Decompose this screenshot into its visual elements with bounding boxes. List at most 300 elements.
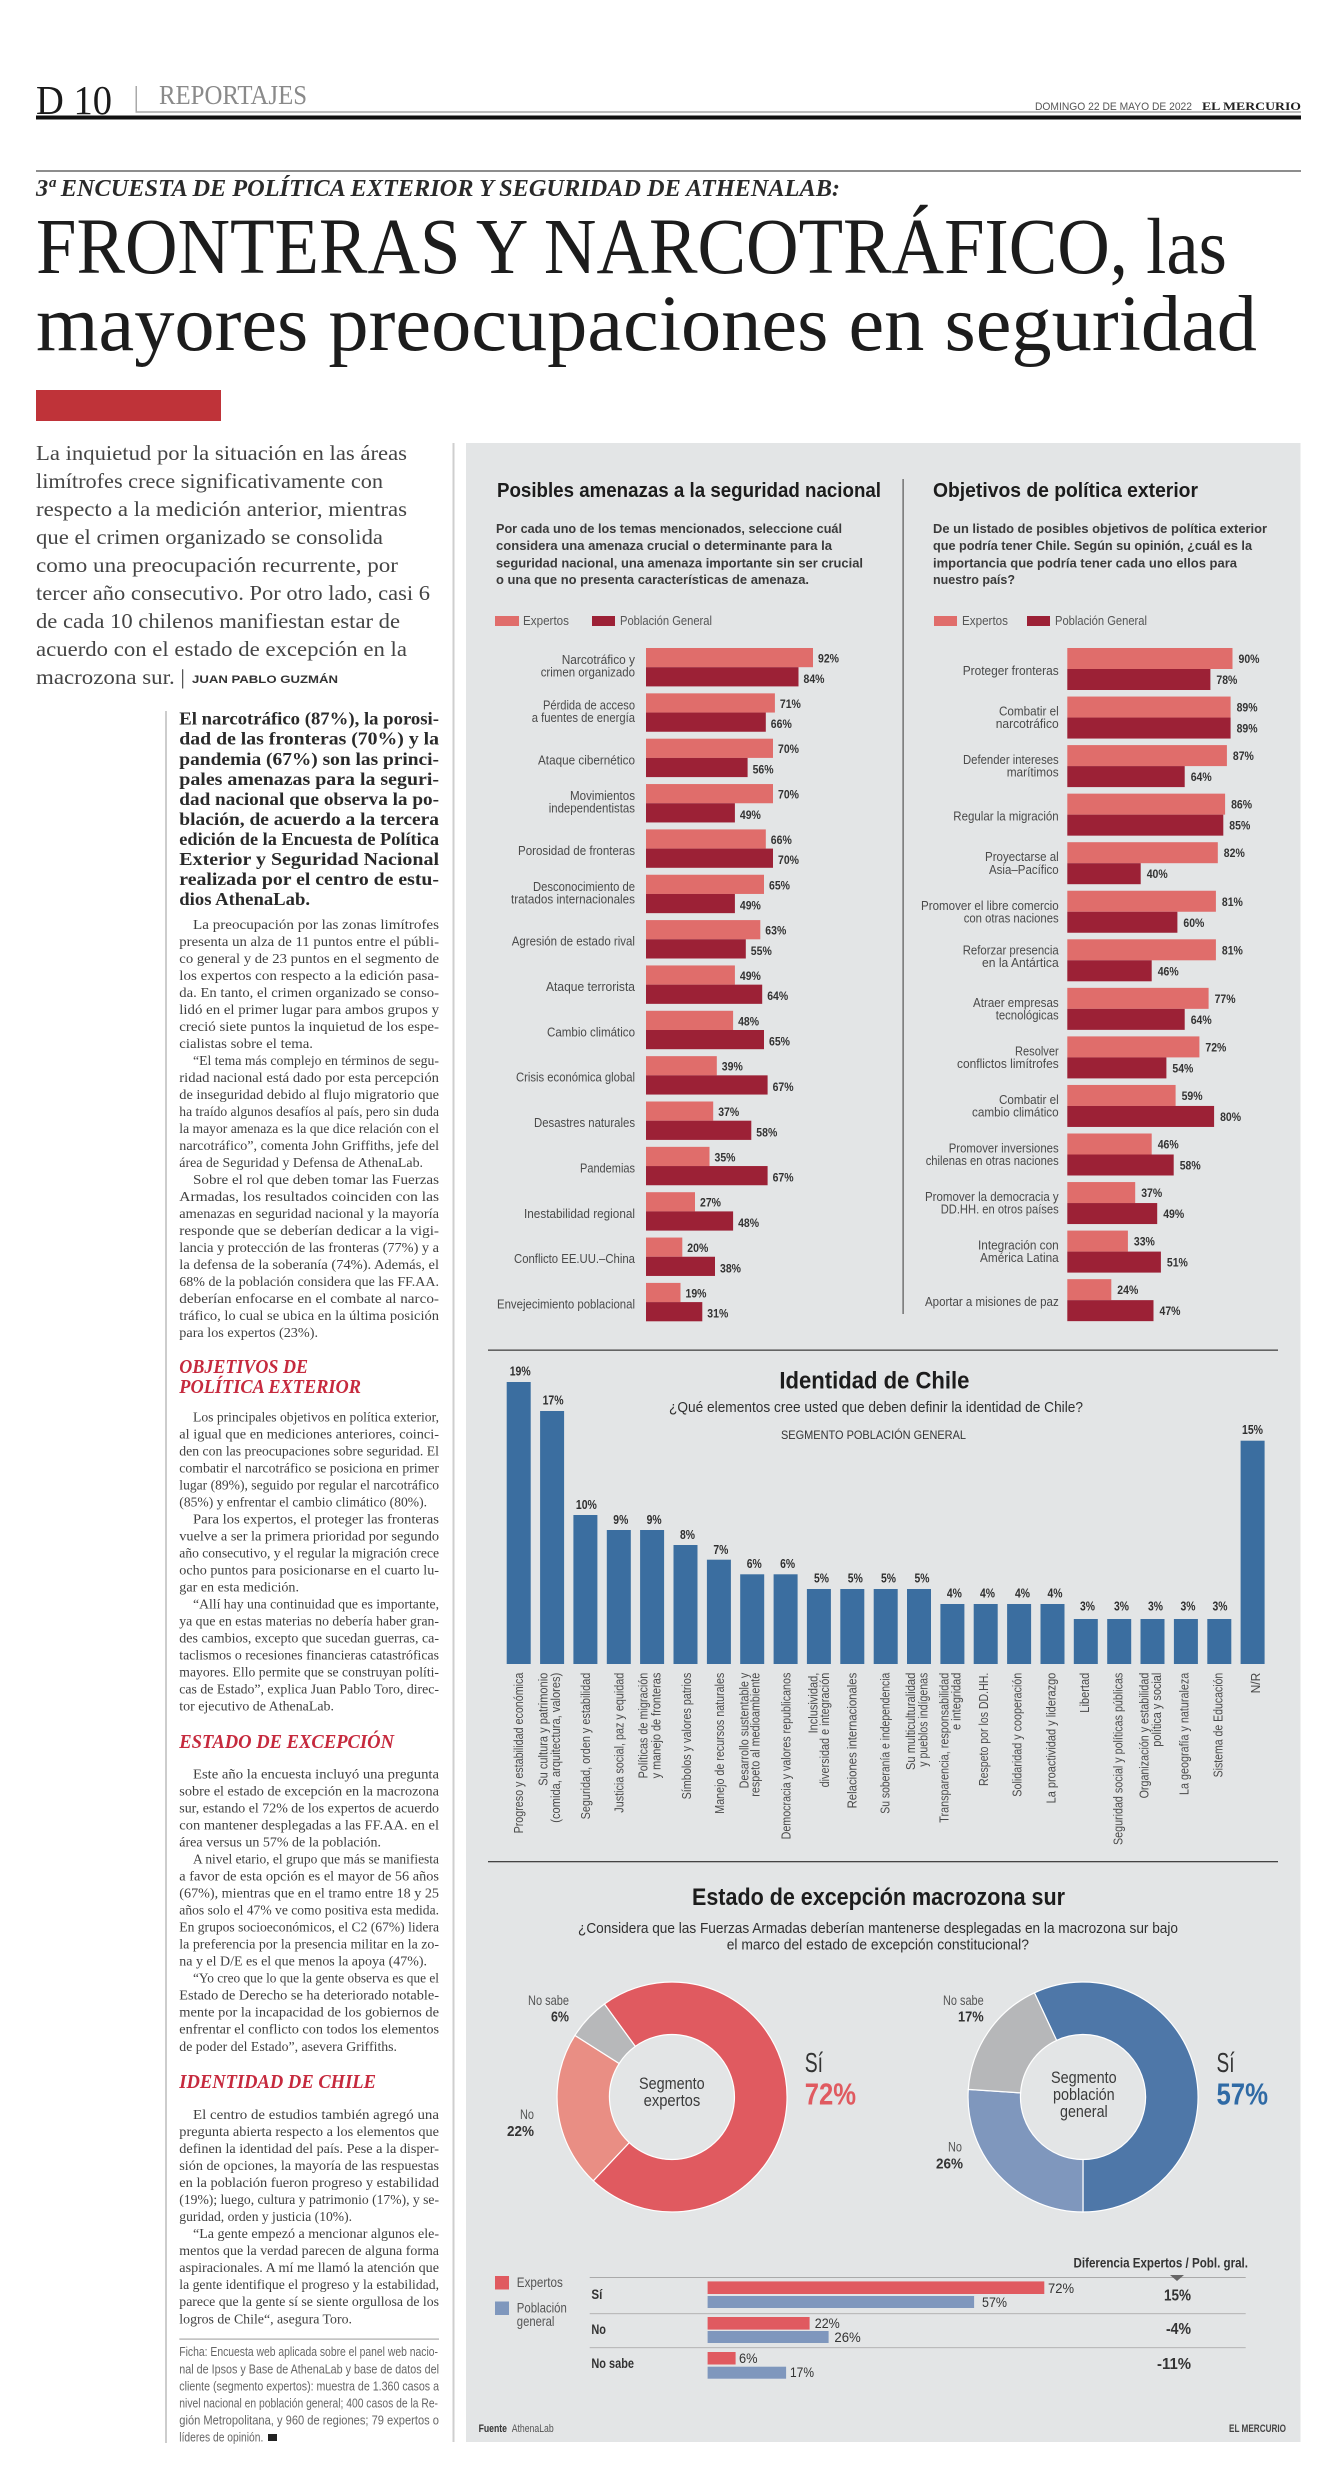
panel: estado de excepción macrozona sur [479, 1884, 1286, 2435]
body text: objetivos [179, 1410, 439, 1714]
row: terrorista [546, 965, 788, 1004]
row: cambio climático: cambio climático [972, 1106, 1059, 1120]
methodology note: Ficha: Encuesta web aplicada sobre el panel web nacio- [179, 2345, 438, 2359]
row: marítimos: 64% [1191, 772, 1212, 784]
question [578, 1920, 1178, 1954]
intro paragraph: blación, de acuerdo a la tercera [179, 809, 439, 829]
body text: seguridad nacional: amenazas en seguridad nacional y la mayoría [179, 1207, 440, 1222]
heading: Estado de excepción macrozona sur [692, 1884, 1065, 1911]
body text: seguridad nacional: da. En tanto, el crimen organizado se conso- [179, 986, 439, 1001]
body text: seguridad nacional: lidó en el primer lugar para ambos grupos y [179, 1003, 439, 1018]
segment label: SEGMENTO POBLACIÓN GENERAL [781, 1427, 966, 1442]
bar values: 10% [576, 1497, 597, 1512]
body text: objetivos: Los principales objetivos en política exterior, [193, 1410, 439, 1426]
row: cambio climático: 59% [1182, 1091, 1203, 1103]
body text: identidad: en la población fueron progreso y estabilidad [179, 2176, 439, 2191]
label: sí: Sí [805, 2047, 823, 2078]
row: no: 26% [834, 2329, 861, 2345]
row: democracia: 49% [1163, 1209, 1184, 1221]
row: estado rival: 55% [751, 946, 772, 958]
label: no sabe [528, 1992, 569, 2026]
bar values: 3% [1114, 1599, 1129, 1614]
intro paragraph: El narcotráfico (87%), la porosi- [179, 709, 439, 729]
row: libre comercio: Promover el libre comercio [921, 899, 1059, 913]
body text: seguridad nacional: la defensa de la soberanía (74%). Además, el [179, 1258, 439, 1273]
body text: estado de excepción: con mantener desplegadas a las FF.AA. en el [179, 1819, 439, 1834]
row: crisis económica: Crisis económica global [516, 1071, 635, 1085]
title line 2: mayores preocupaciones en seguridad [36, 281, 1257, 368]
row: sí: 57% [982, 2294, 1007, 2310]
row: envejecimiento [497, 1283, 728, 1321]
rotated category labels: Manejo de recursos naturales [713, 1673, 727, 1814]
legend: Expertos [962, 614, 1008, 628]
row: cambio climático: Cambio climático [547, 1025, 635, 1039]
rotated category labels: y pueblos indígenas [917, 1673, 931, 1767]
body text: objetivos: combatir el narcotráfico se posiciona en primer [179, 1462, 439, 1476]
row: migración: 85% [1229, 821, 1250, 833]
row: fronteras [963, 648, 1260, 690]
article column [165, 709, 440, 2444]
row: desastres: 37% [718, 1107, 739, 1119]
row: Antártica: en la Antártica [982, 956, 1059, 970]
donut center label [1051, 2068, 1117, 2121]
row: limítrofes: Resolver [1015, 1044, 1059, 1058]
bars [507, 1382, 1265, 1664]
row: limítrofes: 72% [1205, 1042, 1226, 1054]
row: estado rival: 63% [765, 926, 786, 938]
body text: objetivos: ocho puntos para posicionarse en el cuarto lu- [179, 1564, 439, 1578]
body text: identidad [179, 2108, 440, 2328]
body text: objetivos: año consecutivo, y el regular la migración crece [179, 1546, 439, 1562]
bar values: 9% [647, 1512, 662, 1527]
body text: identidad: pregunta abierta respecto a los elementos que [179, 2125, 439, 2140]
body text: estado de excepción: la preferencia por la presencia militar en la zo- [179, 1938, 439, 1953]
body text: objetivos: vuelve a ser la primera prioridad por segundo [179, 1530, 439, 1544]
row: pandemias: 35% [714, 1152, 736, 1164]
label: no sabe [943, 1992, 984, 2026]
row: sí: 72% [1048, 2280, 1074, 2296]
question: seguridad nacional, una amenaza importante sin ser crucial [496, 555, 863, 570]
body text: seguridad nacional: cialistas sobre el tema. [179, 1037, 313, 1052]
rotated category labels: Seguridad social y políticas públicas [1112, 1673, 1126, 1845]
bar values: 5% [881, 1570, 896, 1586]
row: desastres: Desastres naturales [534, 1116, 635, 1130]
row: no sabe [591, 2350, 1191, 2380]
row: narcotráfico: 84% [804, 674, 824, 686]
intro paragraph [179, 709, 439, 909]
row: no sabe: No sabe [591, 2356, 634, 2371]
panel: identidad de Chile [507, 1364, 1265, 1845]
label: no sabe: 17% [958, 2008, 984, 2026]
row: tecnológicas: Atraer empresas [973, 996, 1059, 1010]
row: envejecimiento: Envejecimiento poblacional [497, 1298, 635, 1312]
row: porosidad [518, 829, 799, 868]
row: conflicto [514, 1238, 741, 1276]
row: no sabe: 6% [739, 2350, 758, 2366]
question: nuestro país? [933, 572, 1015, 587]
row: libre comercio: con otras naciones [964, 911, 1059, 925]
row: tratados: tratados internacionales [511, 892, 635, 906]
body text: seguridad nacional: deberían enfocarse en el combate al narco- [179, 1292, 439, 1307]
donut chart: segmento población general [936, 1982, 1268, 2212]
body text: objetivos: tor ejecutivo de AthenaLab. [179, 1700, 334, 1714]
lede: La inquietud por la situación en las áreas [36, 441, 407, 465]
bar values: 9% [613, 1512, 629, 1527]
row: cambio climático: Combatir el [999, 1093, 1059, 1107]
body text: estado de excepción: años solo el 47% ve como positiva esta medida. [179, 1904, 439, 1919]
body text: estado de excepción: En grupos socioeconómicos, el C2 (67%) lidera [179, 1921, 440, 1936]
legend: Expertos [523, 614, 569, 628]
body text: identidad: “La gente empezó a mencionar algunos ele- [193, 2227, 439, 2242]
lede: limítrofes crece significativamente con [36, 469, 383, 493]
row: no sabe: 17% [790, 2364, 814, 2380]
bar values: 4% [1015, 1586, 1030, 1601]
donut center label [639, 2074, 705, 2110]
subheading: objetivos: POLÍTICA EXTERIOR [178, 1375, 361, 1398]
body text: objetivos: cas de Estado”, explica Juan Pablo Toro, direc- [179, 1682, 439, 1698]
row: no [591, 2315, 1191, 2345]
row: crisis económica [516, 1056, 794, 1095]
rotated category labels: Democracia y valores republicanos [780, 1673, 794, 1839]
comparison legend: general [517, 2313, 554, 2329]
row: tratados: Desconocimiento de [533, 880, 635, 894]
rotated category labels: La geografía y naturaleza [1177, 1673, 1191, 1795]
row: no: No [591, 2322, 606, 2337]
body text: estado de excepción: A nivel etario, el grupo que más se manifiesta [193, 1853, 440, 1868]
row: América Latina: 33% [1134, 1237, 1155, 1249]
rotated category labels: N/R [1249, 1673, 1263, 1693]
row: narcotráfico: crimen organizado [541, 666, 635, 680]
methodology note: gión Metropolitana, y 960 de regiones; 79 expertos o [179, 2414, 439, 2428]
label: sí: Sí [1216, 2047, 1235, 2078]
row: sí: 15% [1164, 2288, 1191, 2305]
row: narcotráfico [541, 648, 839, 686]
bar values: 8% [680, 1527, 695, 1542]
row: energía: 66% [771, 719, 792, 731]
body text: seguridad nacional: tráfico, lo cual se ubica en la última posición [179, 1309, 439, 1324]
body text: seguridad nacional: ridad nacional está dado por esta percepción [179, 1071, 439, 1086]
row: conflicto: 20% [687, 1243, 708, 1255]
row: inversiones: 58% [1180, 1160, 1201, 1172]
body text: identidad: sión de opciones, la mayoría de las respuestas [179, 2159, 439, 2174]
body text: identidad: guridad, orden y justicia (10%). [179, 2210, 352, 2225]
body text: estado de excepción: na y el D/E es el que menos la apoya (47%). [179, 1955, 427, 1970]
question: Por cada uno de los temas mencionados, seleccione cuál [496, 521, 842, 536]
legend [495, 614, 712, 628]
row: migración: 86% [1231, 800, 1252, 812]
body text: objetivos: gar en esta medición. [179, 1580, 299, 1596]
row: democracia [925, 1182, 1184, 1224]
bar values [510, 1364, 1263, 1614]
row: marítimos: Defender intereses [963, 753, 1059, 767]
row: cambio climático [547, 1011, 790, 1049]
methodology note: nivel nacional en población general; 400 casos de la Re- [179, 2397, 438, 2411]
row: libre comercio: 81% [1222, 897, 1243, 909]
body text: seguridad nacional: Armadas, los resultados coinciden con las [179, 1190, 439, 1205]
row: Antártica: Reforzar presencia [963, 943, 1059, 957]
body text: objetivos: den con las preocupaciones sobre seguridad. El [179, 1444, 439, 1460]
row: misiones de paz [925, 1279, 1180, 1321]
row: independentistas: 49% [740, 810, 761, 822]
subheading: objetivos [178, 1356, 361, 1398]
question: o una que no presenta características de amenaza. [496, 572, 809, 587]
row: limítrofes: 54% [1172, 1063, 1193, 1075]
kicker: 3ª ENCUESTA DE POLÍTICA EXTERIOR Y SEGURIDAD DE ATHENALAB: [35, 176, 840, 202]
row: América Latina: 51% [1167, 1258, 1188, 1270]
row: marítimos: marítimos [1007, 766, 1059, 780]
rotated category labels: Símbolos y valores patrios [680, 1673, 694, 1799]
row: migración [953, 794, 1252, 836]
row: pandemias [580, 1147, 794, 1185]
body text: estado de excepción: a favor de esta opción es el mayor de 56 años [179, 1870, 439, 1885]
body text: objetivos: al igual que en mediciones anteriores, coinci- [179, 1428, 439, 1442]
row: narcotráfico [996, 697, 1258, 739]
rotated category labels: respeto al medioambiente [748, 1673, 762, 1797]
subheading: estado de excepción: ESTADO DE EXCEPCIÓN [178, 1729, 395, 1753]
bar values: 5% [848, 1570, 863, 1586]
body text: estado de excepción: sobre el estado de excepción en la macrozona [179, 1785, 440, 1800]
row: cambio climático: 80% [1220, 1112, 1241, 1124]
row: crisis económica: 39% [722, 1062, 743, 1074]
row: no: 22% [815, 2315, 840, 2331]
body text: identidad: aspiracionales. A mí me llamó la atención que [179, 2261, 439, 2276]
question [496, 521, 863, 587]
row: democracia: Promover la democracia y [925, 1190, 1059, 1204]
source credit: AthenaLab [512, 2423, 554, 2435]
row: cibernético: Ataque cibernético [538, 753, 635, 767]
body text: objetivos: taclismos o recesiones financieras catastróficas [179, 1648, 439, 1664]
row: independentistas: Movimientos [570, 789, 635, 803]
row: América Latina: Integración con [978, 1239, 1059, 1253]
row: narcotráfico: narcotráfico [996, 717, 1059, 731]
label: no [936, 2138, 963, 2172]
source credit: Fuente [479, 2423, 507, 2435]
row: fronteras: Proteger fronteras [963, 664, 1059, 678]
body text: objetivos: “Allí hay una continuidad que es importante, [193, 1598, 439, 1612]
row: narcotráfico: 92% [818, 654, 839, 666]
bar values: 4% [947, 1586, 962, 1601]
rotated category labels: Su soberanía e independencia [878, 1673, 892, 1814]
row: porosidad: Porosidad de fronteras [518, 844, 635, 858]
body text: seguridad nacional: Sobre el rol que deben tomar las Fuerzas [193, 1173, 439, 1188]
body text: objetivos: ya que en estas materias no debería haber gran- [179, 1614, 439, 1630]
row: libre comercio [921, 891, 1243, 933]
row: terrorista: Ataque terrorista [546, 980, 635, 994]
row: Asia-Pacífico [985, 842, 1245, 884]
methodology note: cliente (segmento expertos): muestra de 1.360 casos a [179, 2380, 439, 2394]
lede: de cada 10 chilenos manifiestan estar de [36, 609, 400, 633]
body text: identidad: la gente identifique el progreso y la estabilidad, [179, 2278, 439, 2293]
rotated category labels: Progreso y estabilidad económica [512, 1673, 526, 1833]
bar values: 4% [980, 1586, 995, 1601]
bar values: 6% [780, 1556, 795, 1571]
methodology note: líderes de opinión. [179, 2430, 263, 2444]
bar values: 7% [713, 1542, 729, 1557]
rotated category labels: Su cultura y patrimonio [536, 1673, 550, 1786]
intro paragraph: dad de las fronteras (70%) y la [179, 729, 439, 749]
row: cambio climático: 48% [738, 1016, 759, 1028]
bar values: 6% [747, 1556, 762, 1571]
body text: seguridad nacional: los expertos con respecto a la edición pasa- [179, 969, 439, 984]
body text: seguridad nacional: responde que se deberían dedicar a la vigi- [179, 1224, 439, 1239]
row: pandemias: 67% [773, 1173, 794, 1185]
row: terrorista: 49% [740, 971, 761, 983]
rotated category labels: Su multiculturalidad [904, 1673, 918, 1770]
row: Asia-Pacífico: 40% [1147, 869, 1168, 881]
row: Asia-Pacífico: Asia–Pacífico [989, 863, 1059, 877]
arrow marker [1170, 2275, 1184, 2281]
row: cibernético [538, 739, 799, 777]
page header [36, 77, 1301, 123]
date: DOMINGO 22 DE MAYO DE 2022 [1035, 101, 1192, 113]
body text: seguridad nacional: presenta un alza de 11 puntos entre el públi- [179, 935, 439, 950]
intro paragraph: realizada por el centro de estu- [179, 869, 439, 889]
row: fronteras: 90% [1238, 654, 1260, 666]
row: América Latina: América Latina [980, 1251, 1059, 1265]
body text: identidad: definen la identidad del país. Pese a la disper- [179, 2142, 439, 2157]
subheading: objetivos: OBJETIVOS DE [179, 1356, 308, 1378]
source credit [479, 2423, 554, 2435]
lede: tercer año consecutivo. Por otro lado, casi 6 [36, 581, 430, 605]
row: conflicto: Conflicto EE.UU.–China [514, 1252, 635, 1266]
rotated category labels: La proactividad y liderazgo [1045, 1673, 1059, 1803]
row: cambio climático: 65% [769, 1037, 790, 1049]
question: considera una amenaza crucial o determinante para la [496, 538, 833, 553]
body text: estado de excepción: enfrentar el conflicto con todos los elementos [179, 2023, 439, 2038]
row: libre comercio: 60% [1183, 918, 1204, 930]
label: no sabe: No sabe [528, 1992, 569, 2008]
body text: estado de excepción [179, 1768, 440, 2055]
body text: seguridad nacional: 68% de la población considera que las FF.AA. [179, 1275, 439, 1290]
row: narcotráfico: Combatir el [999, 705, 1059, 719]
row: misiones de paz: 24% [1117, 1285, 1138, 1297]
donut center label: Segmento [1051, 2068, 1117, 2087]
body text: seguridad nacional: “El tema más complejo en términos de segu- [193, 1054, 439, 1069]
row: Asia-Pacífico: Proyectarse al [985, 850, 1059, 864]
rotated category labels: Sistema de Educación [1211, 1673, 1225, 1777]
legend: Población General [620, 614, 712, 628]
body text: objetivos: des cambios, excepto que sucedan guerras, ca- [179, 1632, 439, 1646]
row: inestabilidad: 27% [700, 1198, 721, 1210]
intro paragraph: Exterior y Seguridad Nacional [179, 849, 439, 869]
body text: estado de excepción: Estado de Derecho se ha deteriorado notable- [179, 1989, 439, 2004]
heading: Objetivos de política exterior [933, 480, 1198, 502]
bar values: 15% [1242, 1422, 1263, 1437]
body text: seguridad nacional: ha traído algunos desafíos al país, pero sin duda [179, 1105, 440, 1120]
intro paragraph: dad nacional que observa la po- [179, 789, 439, 809]
row: América Latina [978, 1231, 1188, 1273]
lede: acuerdo con el estado de excepción en la [36, 637, 407, 661]
row: energía [532, 693, 801, 732]
body text: objetivos: Para los expertos, el proteger las fronteras [193, 1512, 439, 1528]
label: no sabe: 6% [551, 2008, 569, 2026]
red block [36, 390, 221, 421]
intro paragraph: pales amenazas para la seguri- [179, 769, 439, 789]
row: democracia: 37% [1141, 1188, 1162, 1200]
rotated category labels [512, 1672, 1263, 1845]
bar values: 17% [543, 1392, 564, 1408]
row: inestabilidad: Inestabilidad regional [524, 1207, 635, 1221]
headline block [35, 170, 1301, 421]
methodology note: nal de Ipsos y Base de AthenaLab y base de datos del [179, 2362, 439, 2376]
label: sí: 72% [805, 2077, 856, 2112]
row: narcotráfico: Narcotráfico y [562, 653, 636, 667]
rotated category labels: e integridad [950, 1673, 964, 1730]
row: energía: 71% [780, 699, 801, 711]
row: no sabe: -11% [1157, 2356, 1191, 2373]
body text: seguridad nacional: la mayor amenaza es la que dice relación con el [179, 1122, 439, 1137]
row: misiones de paz: Aportar a misiones de paz [925, 1295, 1059, 1309]
bar values: 19% [510, 1364, 531, 1379]
row: independentistas: independentistas [549, 802, 635, 816]
row: estado rival [512, 920, 786, 958]
body text: seguridad nacional: de inseguridad debido al flujo migratorio que [179, 1088, 439, 1103]
page number: D 10 [36, 77, 112, 123]
byline: JUAN PABLO GUZMÁN [192, 673, 338, 686]
row: sí: Sí [591, 2287, 603, 2302]
intro paragraph: pandemia (67%) son las princi- [179, 749, 439, 769]
row: energía: Pérdida de acceso [543, 698, 635, 712]
body text: estado de excepción: (67%), mientras que en el tramo entre 18 y 25 [179, 1887, 439, 1902]
body text: seguridad nacional: creció siete puntos la inquietud de los espe- [179, 1020, 439, 1035]
row: narcotráfico: 89% [1237, 724, 1258, 736]
row: inversiones: 46% [1158, 1140, 1179, 1152]
row: migración: Regular la migración [953, 810, 1059, 824]
row: inestabilidad: 48% [738, 1218, 759, 1230]
row: Antártica: 46% [1158, 966, 1179, 978]
rotated category labels: Respeto por los DD.HH. [977, 1673, 991, 1786]
rotated category labels: (comida, arquitectura, valores) [549, 1673, 563, 1823]
row: inversiones: chilenas en otras naciones [926, 1154, 1059, 1168]
rotated category labels: y manejo de fronteras [650, 1673, 664, 1778]
body text: seguridad nacional [179, 918, 440, 1341]
rotated category labels: Seguridad, orden y estabilidad [579, 1673, 593, 1819]
rotated category labels: Relaciones internacionales [846, 1673, 860, 1808]
body text: estado de excepción: área versus un 57% de la población. [179, 1836, 381, 1851]
row: desastres: 58% [756, 1127, 777, 1139]
row: limítrofes [957, 1036, 1226, 1078]
question: ¿Qué elementos cree usted que deben definir la identidad de Chile? [669, 1399, 1083, 1416]
lede: como una preocupación recurrente, por [36, 553, 398, 577]
row: energía: a fuentes de energía [532, 711, 635, 725]
rotated category labels: Políticas de migración [637, 1673, 651, 1778]
rotated category labels: Justicia social, paz y equidad [612, 1673, 626, 1813]
body text: seguridad nacional: narcotráfico”, comenta John Griffiths, jefe del [179, 1139, 439, 1154]
heading: Identidad de Chile [779, 1368, 969, 1395]
rotated category labels: política y social [1150, 1673, 1164, 1747]
label: sí [1216, 2047, 1268, 2112]
row: Asia-Pacífico: 82% [1224, 848, 1245, 860]
question: el marco del estado de excepción constitucional? [727, 1936, 1029, 1954]
lede: respecto a la medición anterior, mientras [36, 497, 407, 521]
rotated category labels: Solidaridad y cooperación [1011, 1673, 1025, 1797]
comparison legend [495, 2274, 567, 2329]
row: tecnológicas: 77% [1215, 994, 1236, 1006]
rotated category labels: diversidad e integración [818, 1673, 832, 1787]
body text: identidad: logros de Chile“, asegura Toro. [179, 2312, 352, 2328]
label: sí: 57% [1216, 2077, 1268, 2112]
lede [36, 441, 430, 689]
bar values: 3% [1148, 1599, 1163, 1614]
methodology note [179, 2338, 439, 2444]
body text: seguridad nacional: para los expertos (23%). [179, 1326, 318, 1341]
label: no: 26% [936, 2156, 963, 2172]
row: inversiones: Promover inversiones [949, 1142, 1059, 1156]
panel: posibles amenazas [495, 480, 881, 1321]
label: no [507, 2106, 534, 2140]
rotated category labels: Organización y estabilidad [1137, 1673, 1151, 1798]
row: sí [591, 2280, 1191, 2310]
